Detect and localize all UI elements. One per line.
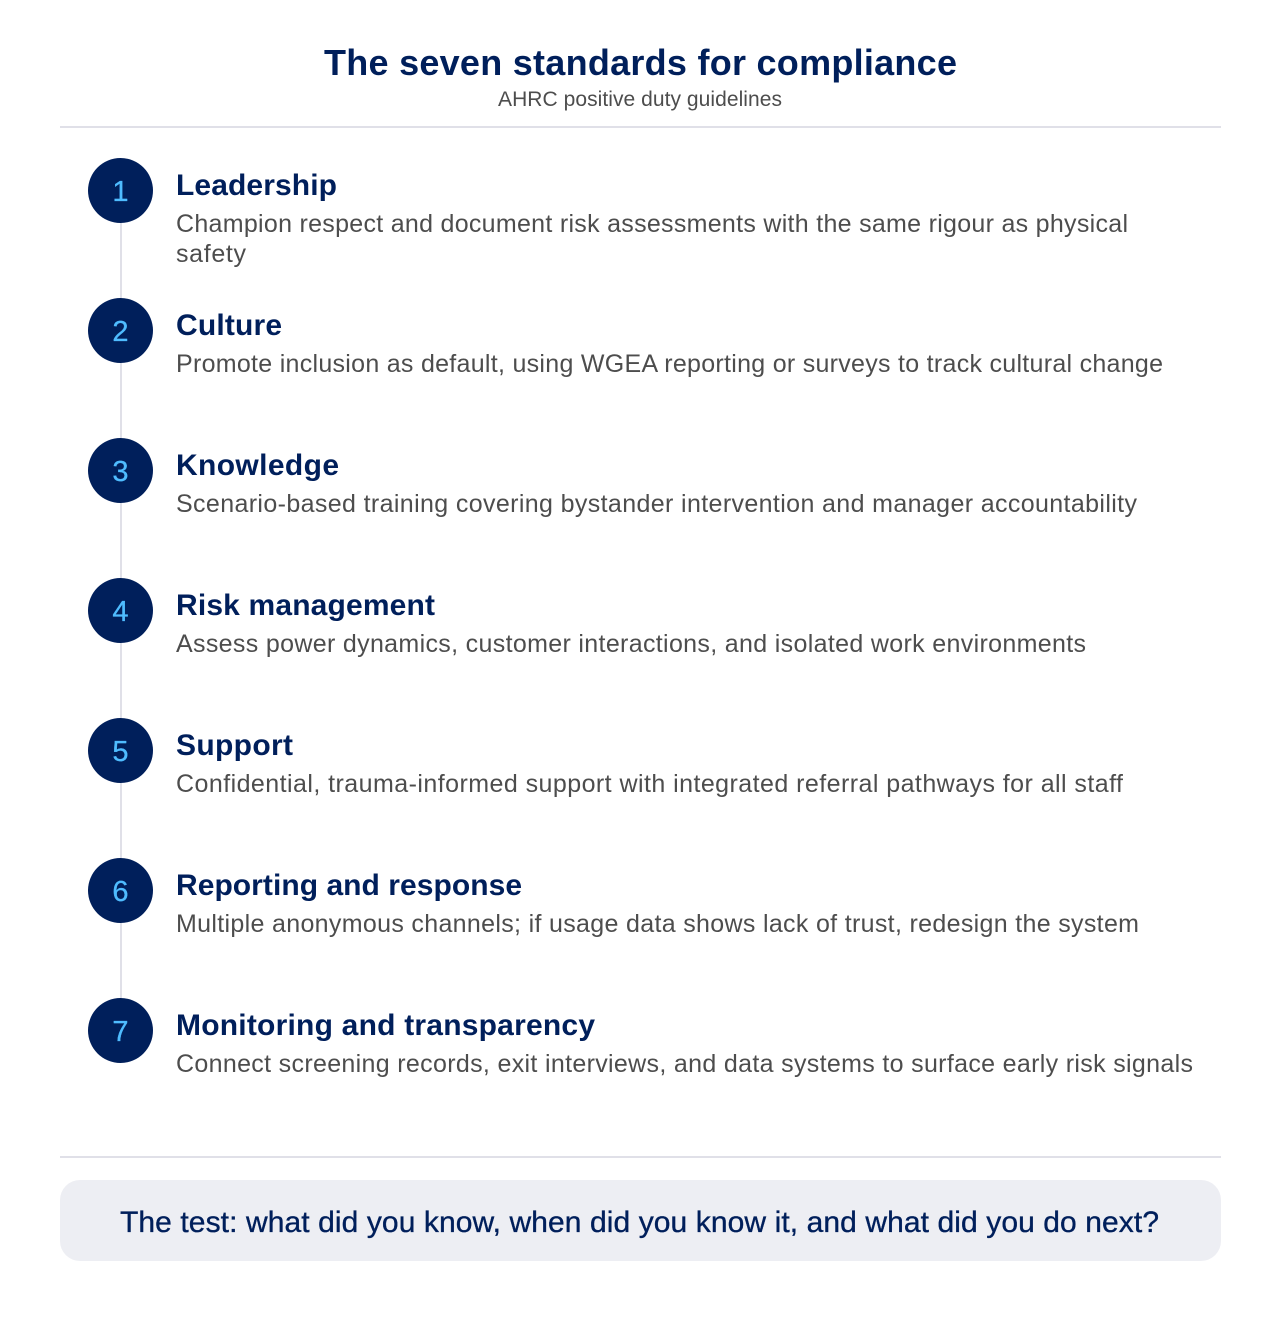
description: safety <box>176 240 246 268</box>
heading: Risk management <box>176 589 435 622</box>
standard 1: leadership <box>88 158 1128 268</box>
number badge 7: 7 <box>112 1016 129 1048</box>
heading: Support <box>176 729 293 762</box>
heading: Monitoring and transparency <box>176 1009 595 1042</box>
standard 7: monitoring and transparency <box>88 998 1193 1078</box>
callout panel <box>60 1180 1221 1261</box>
description: Champion respect and document risk assessments with the same rigour as physical <box>176 210 1128 238</box>
standard 5: support <box>88 718 1123 798</box>
description: Connect screening records, exit interviews, and data systems to surface early risk signals <box>176 1050 1193 1078</box>
number badge 2 <box>88 298 153 363</box>
number badge 4: 4 <box>112 596 129 628</box>
heading: Knowledge <box>176 449 339 482</box>
heading: Leadership <box>176 169 337 202</box>
number badge 3 <box>88 438 153 503</box>
subtitle: AHRC positive duty guidelines <box>498 88 782 111</box>
standard 4: risk management <box>88 578 1086 658</box>
number badge 3: 3 <box>112 456 129 488</box>
number badge 1 <box>88 158 153 223</box>
title: The seven standards for compliance <box>324 42 957 83</box>
description <box>176 210 1128 268</box>
number badge 6 <box>88 858 153 923</box>
number badge 2: 2 <box>112 316 129 348</box>
callout <box>60 1180 1221 1261</box>
number badge 5: 5 <box>112 736 129 768</box>
heading: Reporting and response <box>176 869 522 902</box>
standard 6: reporting and response <box>88 858 1139 938</box>
description: Scenario-based training covering bystander intervention and manager accountability <box>176 490 1138 518</box>
number badge 6: 6 <box>112 876 129 908</box>
description: Promote inclusion as default, using WGEA reporting or surveys to track cultural change <box>176 350 1163 378</box>
callout text: The test: what did you know, when did you know it, and what did you do next? <box>120 1206 1159 1239</box>
description: Multiple anonymous channels; if usage data shows lack of trust, redesign the system <box>176 910 1139 938</box>
standard 3: knowledge <box>88 438 1138 518</box>
number badge 7 <box>88 998 153 1063</box>
heading: Culture <box>176 309 282 342</box>
timeline connector <box>120 190 122 1030</box>
description: Assess power dynamics, customer interactions, and isolated work environments <box>176 630 1086 658</box>
number badge 1: 1 <box>112 176 129 208</box>
standard 2: culture <box>88 298 1163 378</box>
description: Confidential, trauma-informed support with integrated referral pathways for all staff <box>176 770 1123 798</box>
number badge 4 <box>88 578 153 643</box>
number badge 5 <box>88 718 153 783</box>
